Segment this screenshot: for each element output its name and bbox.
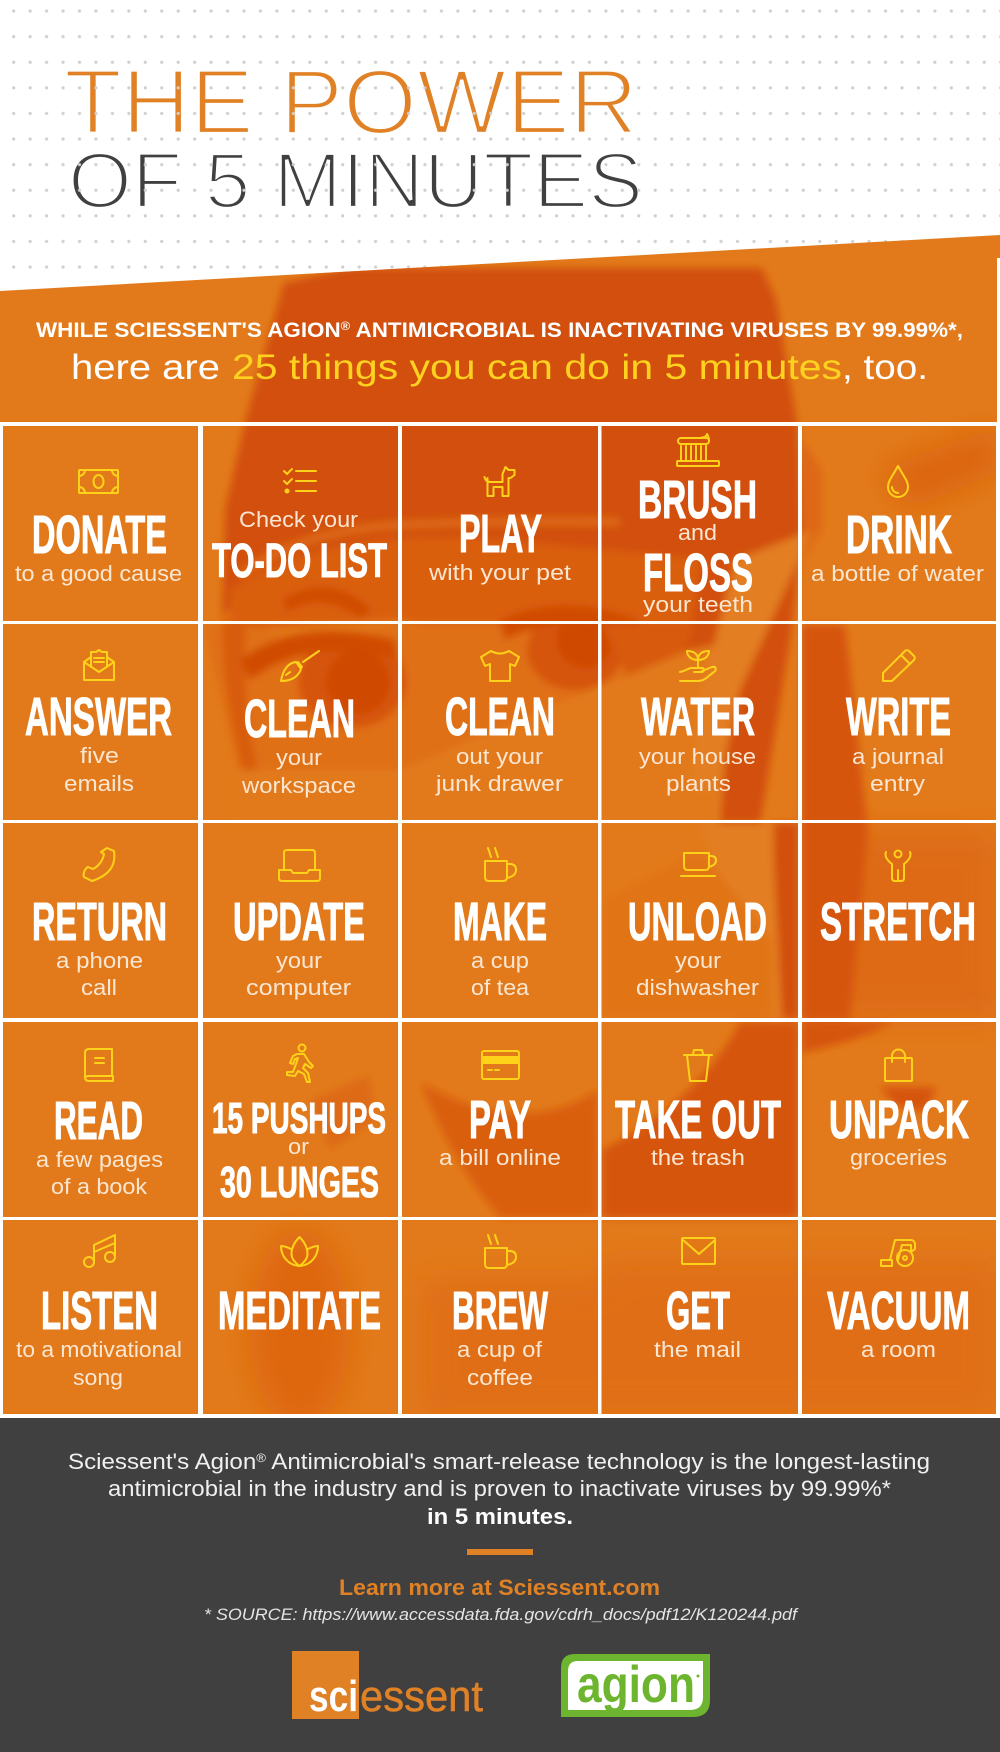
icon: book bbox=[85, 1049, 113, 1081]
cap bbox=[222, 268, 802, 824]
subtext: junk drawer bbox=[435, 771, 563, 796]
header statement: , too. bbox=[842, 348, 928, 387]
subtext: a bottle of water bbox=[811, 561, 984, 586]
subtext: with your pet bbox=[428, 560, 571, 585]
headline: LISTEN bbox=[41, 1281, 158, 1341]
headline: WATER bbox=[641, 687, 755, 747]
icon: trash can bbox=[684, 1050, 712, 1081]
cell: meditate bbox=[218, 1237, 381, 1341]
subtext: entry bbox=[870, 771, 925, 796]
source note: * SOURCE: https://www.accessdata.fda.gov/cdrh_docs/pdf12/K120244.pdf bbox=[204, 1605, 799, 1624]
subtext: of tea bbox=[471, 975, 530, 1000]
subtext: song bbox=[73, 1365, 123, 1390]
headline: FLOSS bbox=[643, 543, 753, 603]
footer statement: ® bbox=[256, 1451, 266, 1465]
right page margin bbox=[997, 258, 1000, 1418]
footer statement: antimicrobial in the industry and is proven to inactivate viruses by 99.99%* bbox=[108, 1476, 891, 1501]
cell: return bbox=[32, 848, 167, 1000]
logo: agion: agion bbox=[577, 1656, 695, 1714]
headline: 30 LUNGES bbox=[220, 1158, 379, 1207]
subtext: dishwasher bbox=[636, 975, 759, 1000]
subtext: workspace bbox=[241, 773, 356, 798]
cell: vacuum bbox=[827, 1240, 970, 1362]
headline: BRUSH bbox=[638, 470, 757, 530]
headline: MAKE bbox=[453, 892, 547, 952]
subtext: a journal bbox=[852, 744, 944, 769]
cell: play bbox=[428, 467, 571, 585]
subtext: your bbox=[675, 948, 721, 973]
divider bar bbox=[467, 1549, 533, 1555]
cell: listen bbox=[16, 1235, 182, 1390]
cell: water plants bbox=[639, 651, 756, 796]
cell: stretch bbox=[820, 850, 976, 952]
lead-in text: Check your bbox=[239, 507, 358, 532]
cell: write bbox=[846, 650, 951, 796]
lower shapes bbox=[774, 823, 798, 1018]
icon: checklist bbox=[284, 469, 316, 492]
icon: music note bbox=[84, 1235, 115, 1267]
header statement bbox=[36, 319, 963, 387]
headline: ANSWER bbox=[25, 687, 172, 747]
subtext: your house bbox=[639, 744, 756, 769]
connector: and bbox=[678, 520, 717, 545]
subtext: the trash bbox=[651, 1145, 745, 1170]
icon: dog bbox=[484, 467, 514, 496]
headline: TAKE OUT bbox=[615, 1090, 781, 1150]
logo: sciessent bbox=[292, 1651, 483, 1721]
title bbox=[64, 52, 643, 224]
mask bbox=[235, 640, 735, 824]
cell: read bbox=[36, 1049, 163, 1199]
headline: PAY bbox=[469, 1090, 531, 1150]
headline: UPDATE bbox=[233, 892, 365, 952]
headline: TO-DO LIST bbox=[212, 535, 387, 588]
icon: water drop bbox=[888, 466, 908, 497]
headline: UNLOAD bbox=[628, 892, 767, 952]
cell: drink bbox=[811, 466, 984, 586]
subtext: emails bbox=[64, 771, 134, 796]
cell: clean junk drawer bbox=[435, 651, 563, 796]
footer statement: in 5 minutes. bbox=[427, 1504, 573, 1529]
cell: pushups or lunges bbox=[212, 1044, 386, 1207]
icon: envelope bbox=[682, 1238, 715, 1264]
headline: DONATE bbox=[32, 505, 167, 565]
footer panel bbox=[0, 1418, 1000, 1752]
headline: BREW bbox=[452, 1281, 548, 1341]
footer statement: Sciessent's Agion bbox=[68, 1449, 240, 1474]
header statement: ® bbox=[341, 319, 350, 333]
dotted background bbox=[0, 0, 1000, 300]
subtext: of a book bbox=[51, 1174, 148, 1199]
cell: make tea bbox=[453, 848, 547, 1000]
icon: credit card bbox=[482, 1051, 519, 1079]
subtext: plants bbox=[666, 771, 731, 796]
icon: laptop bbox=[279, 850, 320, 881]
right eye bbox=[524, 624, 624, 692]
subtext: to a good cause bbox=[15, 561, 182, 586]
header statement: WHILE SCIESSENT'S AGION bbox=[36, 319, 321, 342]
subtext: to a motivational bbox=[16, 1337, 182, 1362]
cell: clean workspace bbox=[241, 651, 356, 798]
icon: open envelope bbox=[84, 650, 114, 680]
cell: brush and floss bbox=[638, 434, 757, 617]
cell: donate bbox=[15, 470, 182, 586]
header statement: here are bbox=[71, 348, 220, 387]
logo: sciessent: sci bbox=[309, 1672, 358, 1721]
subtext: a cup bbox=[471, 948, 529, 973]
subtext: a bill online bbox=[439, 1145, 561, 1170]
forehead and brow bbox=[230, 537, 700, 640]
headline: RETURN bbox=[32, 892, 167, 952]
icon: person stretching bbox=[885, 850, 911, 881]
header statement: ANTIMICROBIAL IS INACTIVATING VIRUSES BY 99.99%*, bbox=[350, 319, 963, 342]
cell: update bbox=[233, 850, 365, 1000]
icon: broom bbox=[281, 651, 319, 681]
subtext: a room bbox=[861, 1337, 936, 1362]
grid lines bbox=[0, 422, 1000, 1418]
icon: toothbrush bbox=[677, 434, 719, 466]
icon: steaming mug bbox=[485, 1235, 516, 1268]
subtext: your bbox=[276, 745, 322, 770]
connector: or bbox=[288, 1134, 309, 1159]
headline: 15 PUSHUPS bbox=[212, 1094, 386, 1143]
background photo: masked healthcare worker, orange tint bbox=[0, 230, 1000, 1430]
cell: take out bbox=[615, 1050, 781, 1170]
subtext: a cup of bbox=[457, 1337, 543, 1362]
subtext: five bbox=[80, 743, 119, 768]
hair bbox=[221, 614, 256, 770]
header statement: 25 things you can do in 5 minutes bbox=[232, 348, 842, 387]
cell: answer bbox=[25, 650, 172, 796]
right shadow bbox=[802, 625, 868, 1020]
cell: pay bbox=[439, 1051, 561, 1170]
icon: cup on saucer bbox=[681, 853, 716, 876]
subtext: your teeth bbox=[643, 592, 753, 617]
subtext: a phone bbox=[56, 948, 143, 973]
cell: brew bbox=[452, 1235, 548, 1390]
call to action: Learn more at Sciessent.com bbox=[339, 1575, 660, 1600]
title: OF 5 MINUTES bbox=[68, 136, 643, 224]
logo: sciessent: essent bbox=[360, 1672, 483, 1721]
subtext: out your bbox=[456, 744, 543, 769]
subtext: coffee bbox=[467, 1365, 533, 1390]
icon: steaming mug bbox=[485, 848, 516, 881]
cell: to-do list bbox=[212, 469, 387, 588]
icon: plant in hand bbox=[680, 651, 716, 681]
icon: vacuum cleaner bbox=[881, 1240, 915, 1266]
headline: GET bbox=[666, 1281, 730, 1341]
face skin bbox=[203, 624, 640, 780]
icon: lotus bbox=[281, 1237, 318, 1266]
icon: pencil bbox=[883, 650, 915, 681]
icon: shopping bag bbox=[885, 1050, 912, 1081]
headline: CLEAN bbox=[445, 687, 555, 747]
cell: unpack bbox=[829, 1050, 969, 1170]
icon: t-shirt bbox=[481, 651, 519, 681]
subtext: computer bbox=[246, 975, 351, 1000]
left eye bbox=[296, 648, 407, 729]
cell: get mail bbox=[654, 1238, 741, 1362]
subtext: the mail bbox=[654, 1337, 741, 1362]
headline: MEDITATE bbox=[218, 1281, 381, 1341]
cell: unload bbox=[628, 853, 767, 1000]
subtext: your bbox=[276, 948, 322, 973]
footer statement: Antimicrobial's smart-release technology is the longest-lasting bbox=[266, 1449, 930, 1474]
icon: runner bbox=[287, 1044, 313, 1082]
icon: phone bbox=[84, 848, 114, 881]
footer statement bbox=[68, 1449, 930, 1529]
icon: banknote bbox=[79, 470, 118, 493]
subtext: call bbox=[81, 975, 117, 1000]
headline: PLAY bbox=[459, 504, 542, 564]
subtext: a few pages bbox=[36, 1147, 163, 1172]
headline: READ bbox=[54, 1091, 143, 1151]
headline: CLEAN bbox=[244, 689, 355, 749]
subtext: groceries bbox=[850, 1145, 947, 1170]
title: THE POWER bbox=[64, 52, 638, 154]
